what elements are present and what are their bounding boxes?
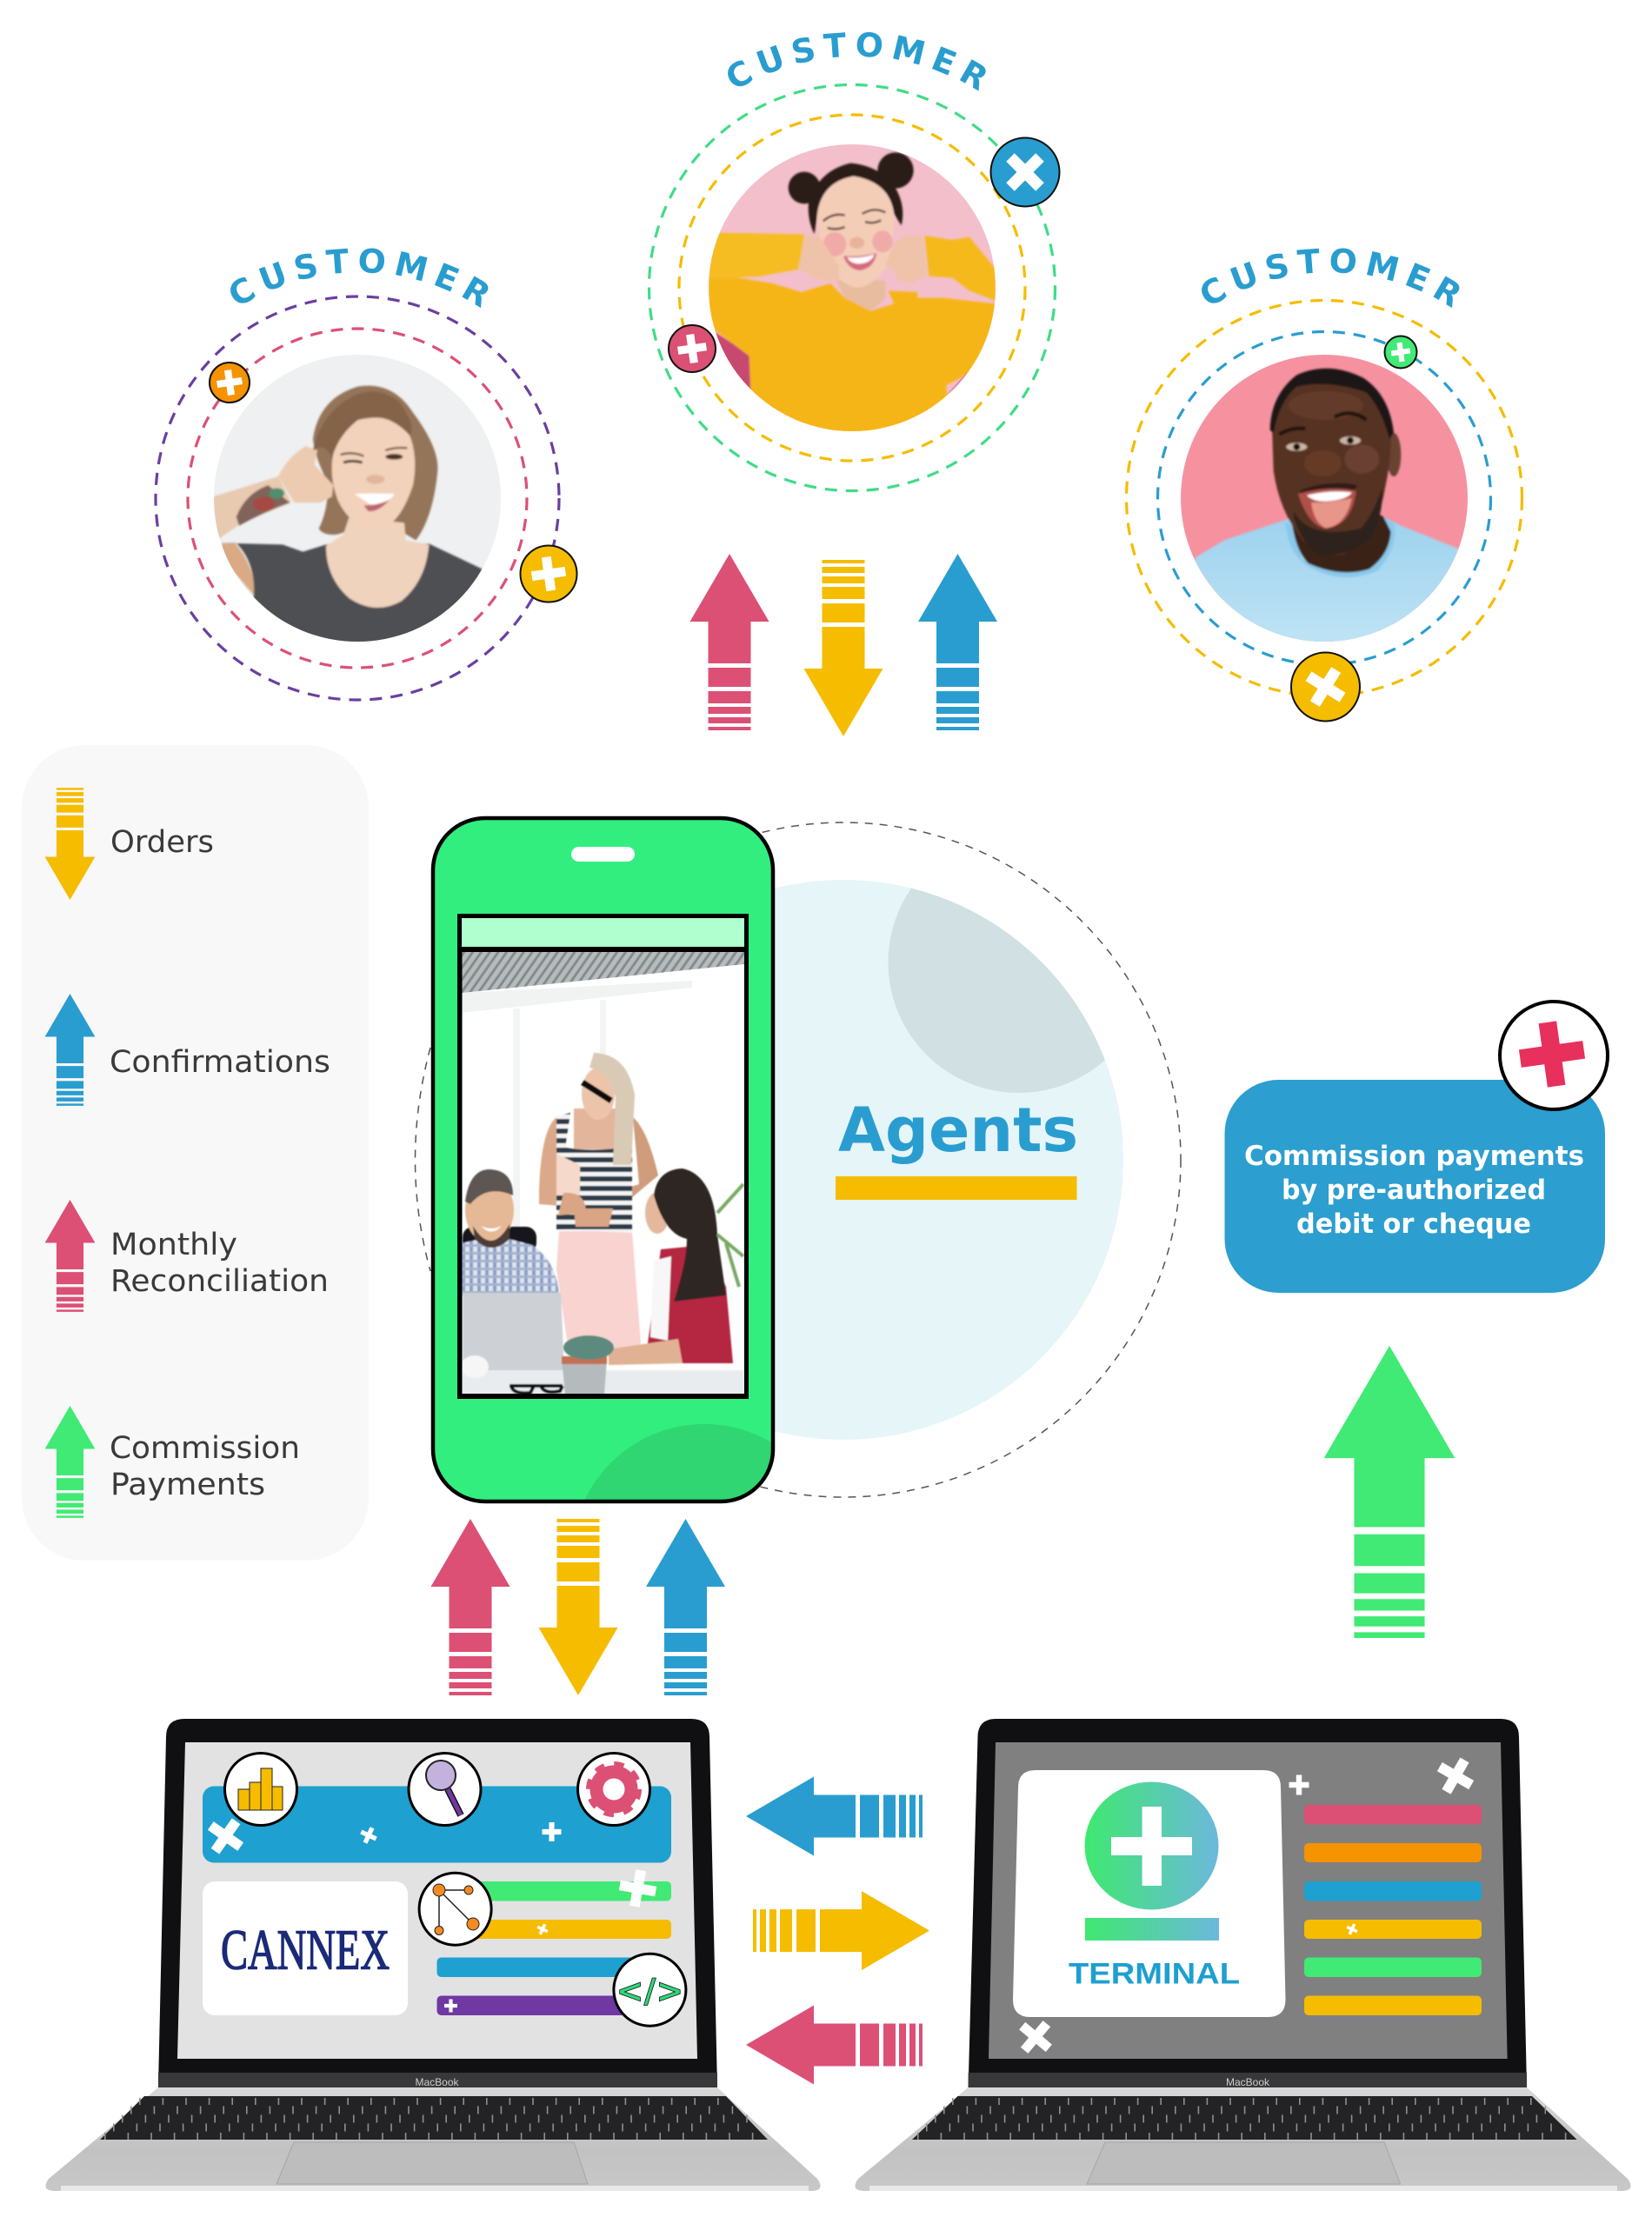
legend item: orders bbox=[45, 788, 214, 900]
pot bbox=[562, 1363, 607, 1394]
laptop brand label: MacBook bbox=[1226, 2076, 1270, 2088]
man shirt bbox=[462, 1235, 559, 1295]
tablet bbox=[556, 1154, 580, 1195]
arrow: terminal to CANNEX blue bbox=[746, 1777, 923, 1855]
customer 3 outer dashed ring bbox=[1127, 301, 1522, 696]
panel: legend bbox=[22, 745, 369, 1561]
laptop: CANNEX bbox=[45, 1719, 821, 2191]
head bbox=[582, 1068, 615, 1120]
commission text bbox=[1244, 1141, 1584, 1240]
agents outer dashed circle bbox=[416, 822, 1181, 1497]
standing woman pants bbox=[556, 1231, 641, 1356]
laptop screen bbox=[989, 1742, 1508, 2059]
laptop: terminal bbox=[855, 1719, 1631, 2191]
laptop screen bbox=[177, 1742, 697, 2059]
legend item: commission payments bbox=[45, 1406, 300, 1518]
laptop brand label: MacBook bbox=[415, 2076, 460, 2088]
laptop lid bbox=[969, 1719, 1527, 2087]
agents heading: Agents bbox=[838, 1095, 1078, 1166]
laptop base bbox=[855, 2087, 1631, 2191]
terminal screen decorations bbox=[1011, 1751, 1481, 2061]
seated woman jacket bbox=[648, 1245, 733, 1363]
screen bars bbox=[436, 1881, 671, 2015]
customer 1 outer dashed ring bbox=[156, 296, 559, 700]
terminal underline bar bbox=[1085, 1918, 1219, 1941]
striped top bbox=[556, 1113, 632, 1233]
customer 2 inner dashed ring bbox=[679, 115, 1025, 461]
customer 1 curved label: CUSTOMER bbox=[230, 249, 489, 308]
arrow: phone link down yellow bbox=[539, 1519, 617, 1695]
customer 2 photo: woman in yellow hoodie bbox=[704, 139, 1000, 439]
succulent bbox=[563, 1335, 614, 1360]
legend item: commission payments: Payments bbox=[110, 1468, 265, 1502]
cup bbox=[461, 1355, 489, 1378]
CANNEX card bbox=[203, 1881, 408, 2015]
panel: commission callout bbox=[1224, 1002, 1608, 1293]
arrow: commission up green bbox=[1324, 1346, 1455, 1638]
commission text: debit or cheque bbox=[1296, 1208, 1531, 1240]
seated woman hair bbox=[645, 1192, 669, 1234]
laptop base bbox=[45, 2087, 821, 2191]
commission text: by pre-authorized bbox=[1282, 1175, 1546, 1206]
glasses bbox=[510, 1386, 563, 1393]
table bbox=[462, 1370, 745, 1396]
arrow: terminal to CANNEX pink bbox=[746, 2005, 923, 2085]
legend item: monthly reconciliation bbox=[45, 1200, 329, 1312]
icon: bar chart bbox=[224, 1753, 297, 1826]
icon: code brackets bbox=[614, 1954, 686, 2026]
panel: agents circle bbox=[416, 822, 1181, 1497]
agents grey segment bbox=[889, 889, 1105, 1093]
customer 2 outer dashed ring bbox=[649, 85, 1056, 490]
customer 3 yellow plus badge bbox=[1291, 652, 1360, 722]
icon: network nodes bbox=[419, 1873, 491, 1945]
screen top band bbox=[203, 1786, 671, 1862]
legend item: commission payments: Commission bbox=[110, 1431, 300, 1466]
plant leaves right bbox=[717, 1184, 743, 1287]
arrow: customers up blue bbox=[918, 554, 997, 730]
laptop lid bbox=[463, 1293, 564, 1372]
terminal label: TERMINAL bbox=[1069, 1957, 1240, 1990]
customer 1 photo: winking woman bbox=[209, 348, 504, 648]
laptop keyboard bbox=[912, 2096, 1577, 2140]
man head bbox=[464, 1191, 515, 1242]
arms bbox=[539, 1117, 567, 1206]
arrow: phone link up blue bbox=[646, 1519, 725, 1695]
customer 1 group bbox=[154, 249, 577, 702]
arrow: phone link up pink bbox=[431, 1519, 510, 1695]
phone bbox=[431, 816, 776, 1504]
phone screen frame bbox=[457, 914, 749, 1399]
man chair bbox=[463, 1226, 537, 1248]
icon: code brackets: </> bbox=[616, 1972, 683, 2010]
phone photo: office meeting bbox=[461, 952, 745, 1396]
commission text: Commission payments bbox=[1244, 1141, 1584, 1172]
arrow: customers down yellow bbox=[803, 560, 883, 736]
icon: red plus badge bbox=[1500, 1002, 1608, 1109]
CANNEX logo text: CANNEX bbox=[221, 1918, 390, 1982]
icon: terminal plus oval bbox=[1085, 1782, 1219, 1909]
neck and chest bbox=[573, 1108, 616, 1151]
customer 2 pink plus badge bbox=[669, 325, 716, 372]
legend item: confirmations: Confirmations bbox=[110, 1045, 330, 1080]
phone header strip bbox=[462, 918, 744, 947]
icon: magnifier bbox=[409, 1753, 481, 1826]
legend item: monthly reconciliation: Reconciliation bbox=[110, 1264, 329, 1299]
customer 3 photo: smiling man bbox=[1174, 348, 1474, 648]
terminal card bbox=[1013, 1770, 1285, 2017]
legend item: monthly reconciliation: Monthly bbox=[110, 1228, 237, 1262]
arrow: CANNEX to terminal yellow bbox=[753, 1891, 929, 1970]
agents underline bbox=[836, 1176, 1076, 1200]
customer 2 curved label: CUSTOMER bbox=[728, 31, 986, 91]
customer 2 group bbox=[647, 31, 1061, 492]
agents pale disc bbox=[563, 880, 1123, 1440]
phone speaker bbox=[571, 847, 635, 862]
terminal bars bbox=[1304, 1805, 1482, 2015]
laptop keyboard bbox=[100, 2096, 768, 2140]
laptop lid bbox=[158, 1719, 717, 2087]
screen decorations bbox=[200, 1811, 659, 2012]
customer 3 inner dashed ring bbox=[1158, 332, 1490, 664]
icon: gear bbox=[577, 1753, 650, 1826]
customer 3 green plus badge bbox=[1384, 336, 1417, 369]
customer 1 inner dashed ring bbox=[188, 329, 527, 668]
customer 1 yellow plus badge bbox=[520, 546, 577, 602]
laptop trackpad bbox=[276, 2142, 588, 2184]
seated woman arm bbox=[609, 1339, 683, 1365]
legend item: confirmations bbox=[45, 994, 330, 1106]
customer 3 group bbox=[1125, 249, 1523, 722]
laptop trackpad bbox=[1087, 2142, 1401, 2184]
arrow: customers up pink bbox=[690, 554, 769, 730]
customer 3 curved label: CUSTOMER bbox=[1202, 249, 1459, 308]
customer 2 blue cross badge bbox=[991, 137, 1059, 207]
legend item: orders: Orders bbox=[110, 825, 214, 860]
customer 1 orange plus badge bbox=[210, 363, 250, 403]
